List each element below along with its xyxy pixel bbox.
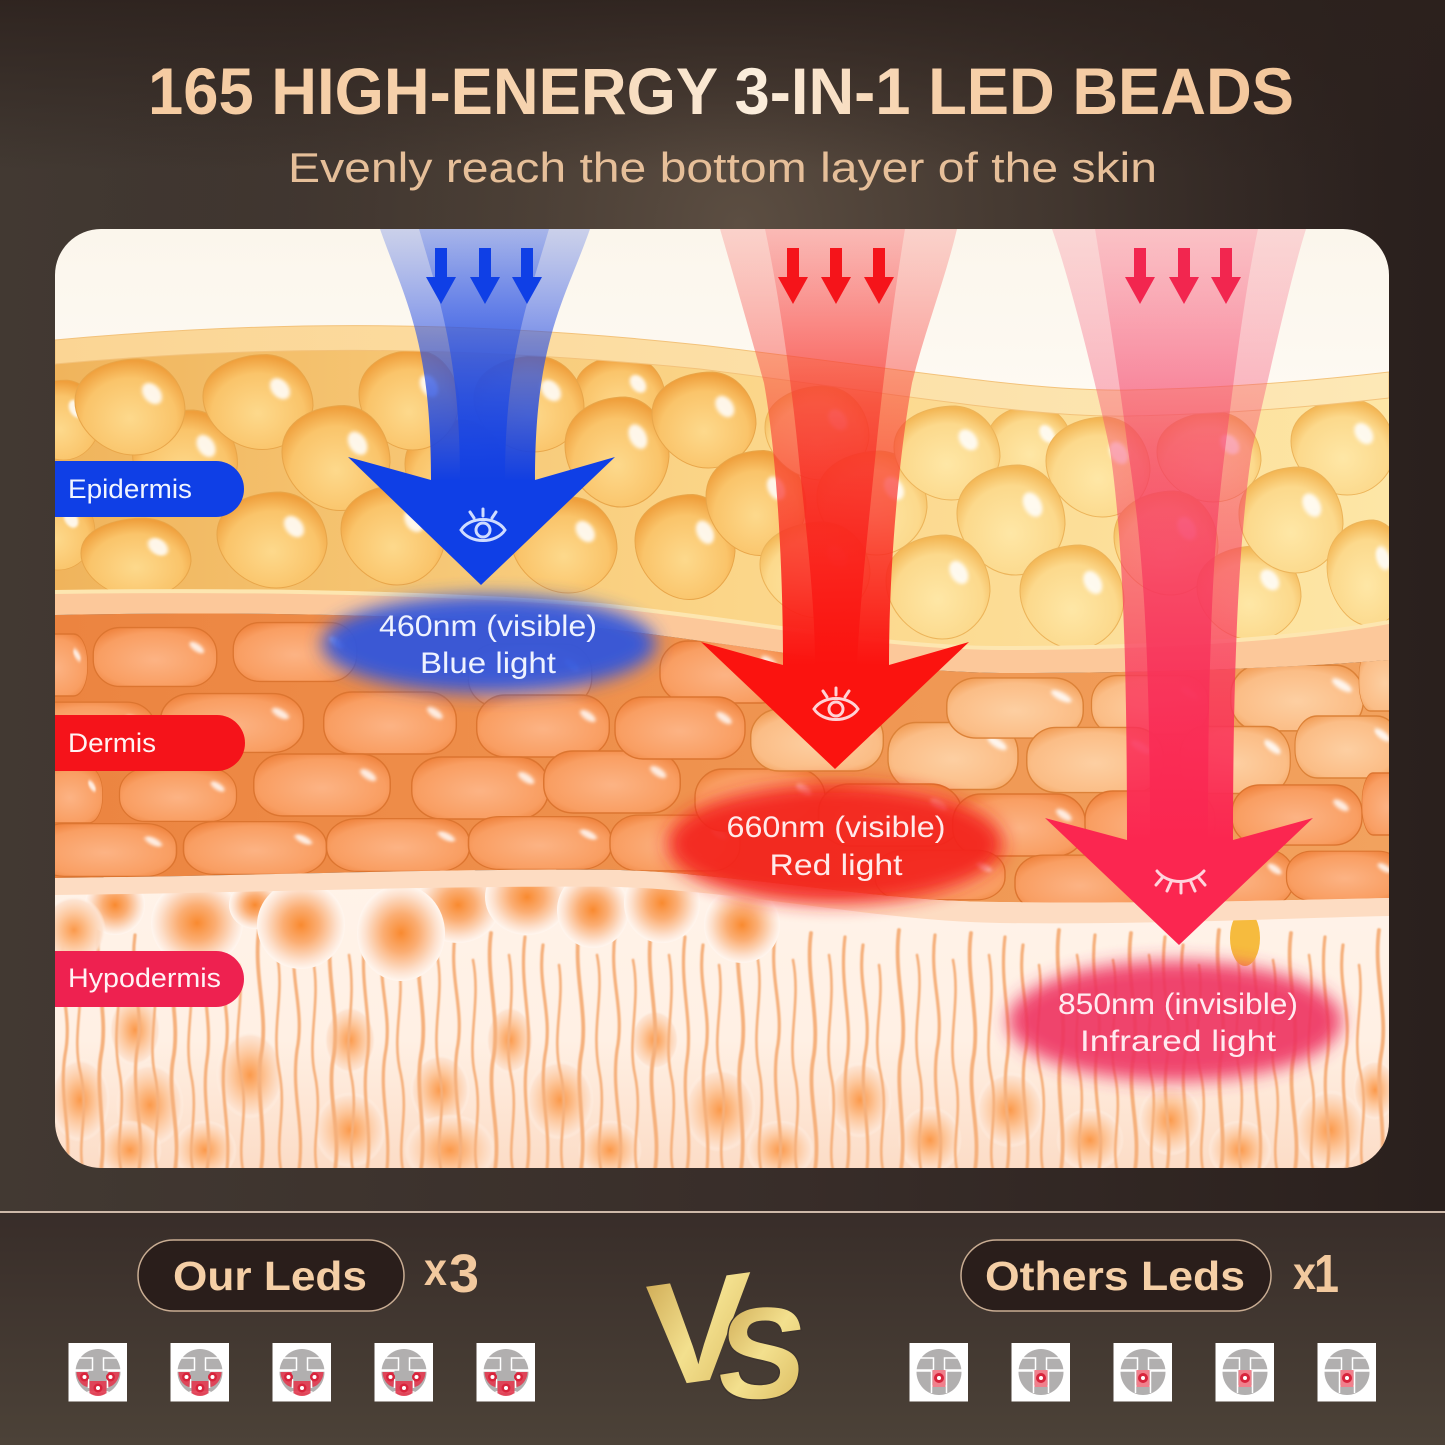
multiplier x3: 3 <box>449 1244 479 1304</box>
outer skin band <box>55 326 1389 416</box>
label: dermis <box>55 715 245 771</box>
pill: our leds <box>138 1240 404 1311</box>
epidermis cell layer <box>15 326 1407 649</box>
label: epidermis <box>55 461 244 517</box>
callout text: red light: Red light <box>770 849 903 882</box>
skin surface background <box>55 229 1389 390</box>
pill: our leds: Our Leds <box>173 1253 367 1299</box>
icon: closed eye infrared <box>1156 871 1205 893</box>
label: epidermis: Epidermis <box>68 474 192 504</box>
small arrows: red <box>778 248 894 304</box>
callout text: infrared light: 850nm (invisible) <box>1058 988 1298 1021</box>
vs mark: V <box>645 1240 751 1421</box>
label: hypodermis: Hypodermis <box>68 963 221 993</box>
arrowhead: red <box>701 642 969 769</box>
callout text: blue light: 460nm (visible) <box>379 610 597 643</box>
lower epidermis band overlap <box>55 591 1389 648</box>
inner blue beam <box>419 229 549 480</box>
led chips: ours <box>68 1343 535 1402</box>
vs mark: S <box>711 1280 813 1426</box>
callout text: red light: 660nm (visible) <box>726 811 946 844</box>
callout text: infrared light: Infrared light <box>1080 1025 1277 1058</box>
pill: others leds: Others Leds <box>985 1253 1245 1299</box>
hypodermis layer <box>55 870 1389 1168</box>
multiplier x1: x <box>1293 1247 1316 1299</box>
multiplier x1 <box>1293 1244 1339 1304</box>
icon: open eye red <box>814 688 858 720</box>
beam: blue light <box>380 229 590 480</box>
arrowhead: blue <box>348 457 615 585</box>
panel: skin cross-section <box>15 229 1445 1186</box>
background cells <box>132 410 238 470</box>
multiplier x3 <box>424 1243 479 1304</box>
multiplier x1: 1 <box>1314 1244 1339 1304</box>
beam: infrared light <box>1052 229 1306 840</box>
comparison footer <box>0 1211 1445 1445</box>
inner infrared beam <box>1095 229 1258 840</box>
multiplier x3: x <box>424 1243 447 1295</box>
arrowhead: infrared <box>1045 818 1313 945</box>
beam: red light <box>720 229 957 665</box>
callout text: blue light: Blue light <box>420 647 557 680</box>
dermis layer <box>22 591 1414 923</box>
inner red beam <box>765 229 905 665</box>
upper dermis boundary band <box>55 591 1389 673</box>
callout glow: blue light <box>322 595 656 693</box>
vs mark <box>645 1240 813 1426</box>
small arrows: infrared <box>1125 248 1241 304</box>
small arrows: blue <box>426 248 542 304</box>
led chips: others <box>910 1343 1376 1402</box>
label: dermis: Dermis <box>68 728 156 758</box>
icon: open eye blue <box>461 509 505 540</box>
subtitle: Evenly reach the bottom layer of the skin <box>288 144 1157 191</box>
callout glow: red light <box>667 784 1003 904</box>
lower dermis boundary band <box>55 870 1389 923</box>
callout glow: infrared light <box>1008 961 1342 1081</box>
label: hypodermis <box>55 951 244 1007</box>
title: 165 HIGH-ENERGY 3-IN-1 LED BEADS <box>148 54 1294 128</box>
pill: others leds <box>961 1240 1271 1311</box>
